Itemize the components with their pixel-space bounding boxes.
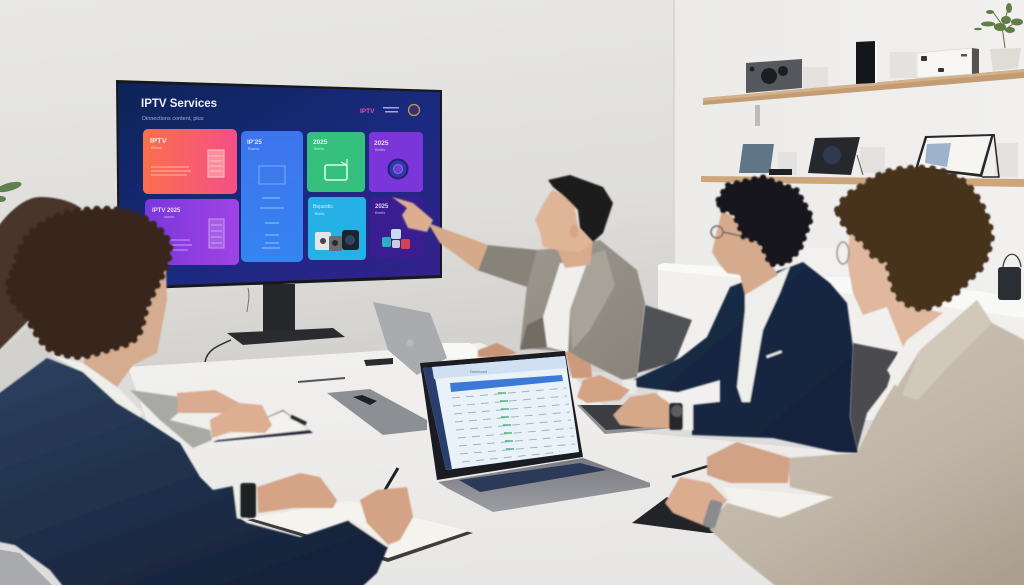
dark inner jacket [520,317,547,350]
black tall device [856,41,877,84]
central laptop: Dashboard [470,370,487,374]
card: purple 2025: 2025 [374,140,389,147]
card: green 2025 [307,132,365,192]
screen [423,356,579,470]
meeting table [128,343,900,585]
wood floor patch [863,573,893,585]
notebook front left [247,501,473,562]
paper behind laptop [442,343,482,358]
TV screen [116,80,442,290]
header [432,356,567,379]
screen header logos: IPTV [360,108,375,115]
table rows [452,388,575,462]
hair [718,177,812,265]
gray laptop at back [364,302,447,375]
card: cyan devices [308,197,366,260]
cuff [683,403,693,430]
screen subtitle: Dinnections content, plus [142,116,204,122]
wall shadows behind devices [778,52,1018,177]
card: orange IPTV: IBrvcs [151,145,162,150]
neck and ear [83,235,167,387]
sidebar [423,367,452,470]
screen title: IPTV Services [141,98,217,110]
hand upper [177,390,243,413]
lower shelf [701,176,1024,187]
base [438,458,650,512]
jacket [0,358,388,585]
rolled sleeve shading [477,245,537,287]
glasses [837,242,849,264]
chair behind presenter [637,305,692,373]
card: blue IP25 [241,131,303,262]
dark tablet [808,137,863,175]
card: purple 2025 [369,132,423,192]
ear [570,224,578,238]
shirt [543,263,587,352]
arm [428,223,488,271]
sweater [0,327,60,410]
card: green 2025: 2025 [313,139,328,146]
TV stand [205,284,345,362]
card: deep purple 2025: Bretis [375,210,385,215]
hair [0,197,82,359]
card: violet lower: IPTV 2025 [152,208,181,214]
pen in hand [385,468,398,490]
jacket [710,300,1024,585]
face and neck [712,210,778,295]
right tablet with notes [632,460,833,533]
card: cyan devices: Bepardis [313,204,333,210]
cuff [233,484,247,520]
wall plant left [0,180,23,202]
neck and face [847,233,943,347]
black cup with handle [998,254,1021,300]
card: deep purple 2025 [370,197,423,258]
shirt [887,313,943,387]
glasses [711,226,741,238]
shirt [737,267,790,402]
watch [669,403,683,430]
cabinet [658,248,1024,420]
hair [548,175,613,242]
watch [240,483,256,518]
clipboard [213,410,313,442]
front-left man [0,209,413,585]
lid frame [420,351,583,480]
hand right [360,487,413,545]
small tablet [739,144,792,175]
hand on notes [707,442,790,483]
pointing hand [392,197,433,232]
hair [8,209,170,357]
pocket square [766,350,782,358]
card: blue IP25: Branis [248,146,259,151]
face [535,190,593,252]
card: cyan devices: Brets [315,211,324,216]
cuff [622,380,636,394]
card: purple 2025: Bretis [375,147,385,152]
card: orange IPTV [143,129,237,194]
hair [837,168,992,310]
beige jacket man [665,168,1024,585]
lapel [902,300,992,400]
card: deep purple 2025: 2025 [375,204,389,210]
chair behind navy man [850,343,898,450]
card: green 2025: Bretis [314,146,324,151]
white framed tablet [915,134,999,177]
cuff right [347,518,388,547]
jacket [477,240,645,380]
jacket [633,262,858,453]
central laptop [420,351,650,512]
hand writing [257,473,337,513]
pen on table [298,378,345,382]
neck [557,240,593,268]
screen header logos [360,104,420,116]
hand on laptop 1 [577,375,630,403]
woman on left [0,197,313,448]
card: violet lower [145,199,239,265]
hand lower [210,403,272,438]
collar [50,355,143,417]
forearm behind [565,350,592,378]
gray tablet on table [327,389,427,435]
speaker device [746,59,802,93]
side laptop [577,405,672,434]
upper shelf [703,69,1024,105]
card: blue IP25: IP'25 [247,139,262,146]
sleeve [130,390,212,448]
navy jacket man [577,177,858,453]
hand on laptop 2 [613,393,672,428]
watch [702,499,723,529]
wall shelves with devices [701,3,1024,187]
hand lower [665,477,727,527]
plant [974,3,1023,71]
presenter [392,175,645,380]
card: orange IPTV: IPTV [150,136,167,145]
chair bottom left [0,548,62,585]
white box device [917,48,979,78]
lower hand [478,343,517,358]
lapel right [570,250,615,350]
